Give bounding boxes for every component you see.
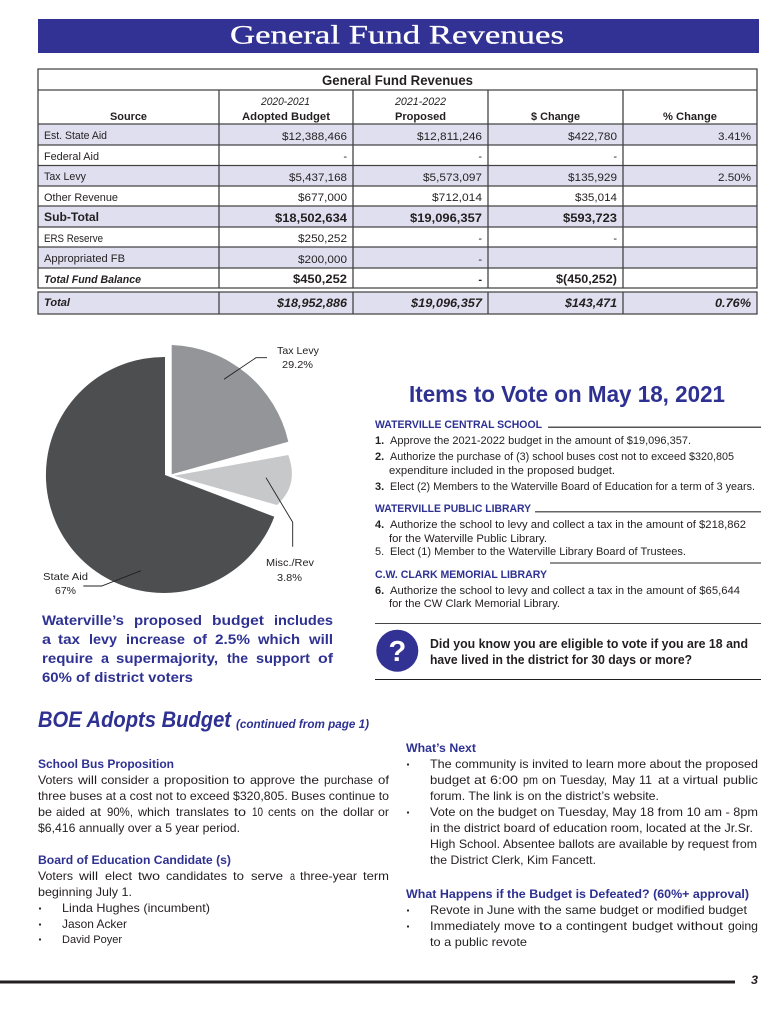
row: Total: $143,471 xyxy=(564,298,617,310)
text block: school bus proposition: or xyxy=(378,805,389,819)
icon: question mark: ? xyxy=(388,636,406,668)
row: ERS Reserve xyxy=(44,233,617,245)
row: Sub-Total: $593,723 xyxy=(563,213,617,225)
text block: board of education candidates: will xyxy=(78,869,98,883)
label: state aid: State Aid xyxy=(43,571,88,583)
text block: what's next: Tuesday, xyxy=(560,773,607,787)
row: Total Fund Balance: $(450,252) xyxy=(556,274,617,286)
table title: General Fund Revenues xyxy=(322,73,473,88)
text block: board of education candidates: elect xyxy=(105,869,133,883)
column headers: % Change xyxy=(663,111,717,123)
text block: what's next: May xyxy=(612,773,635,787)
text block: school bus proposition: the xyxy=(320,805,338,819)
row: Est. State Aid: $12,388,466 xyxy=(282,131,347,143)
column headers: Source xyxy=(110,111,147,123)
label: tax levy: 29.2% xyxy=(282,359,313,371)
text block: what's next: High School. Absentee ballots are available by request from xyxy=(430,837,757,851)
text block: school bus proposition: consider xyxy=(101,773,149,787)
callout: supermajority: Waterville’s xyxy=(42,612,124,628)
row: Sub-Total: $18,502,634 xyxy=(275,213,348,225)
row: ERS Reserve: $250,252 xyxy=(298,233,347,245)
text block: what's next: a xyxy=(673,773,679,787)
callout: supermajority: includes xyxy=(274,612,333,628)
text block: what's next: 11 xyxy=(639,773,652,787)
text block: school bus proposition: which xyxy=(137,805,170,819)
text block: school bus proposition: three buses at a cost not to exceed $320,805. Buses continue to xyxy=(38,789,389,803)
row: Tax Levy: $5,573,097 xyxy=(423,172,482,184)
row: Est. State Aid: $422,780 xyxy=(568,131,617,143)
candidate list: Jason Acker xyxy=(62,917,127,931)
section: Waterville Public Library: 5. xyxy=(375,546,384,558)
text block: if the budget is defeated: move xyxy=(504,919,535,933)
icon: question mark xyxy=(376,630,418,672)
text block: school bus proposition: translates xyxy=(176,805,229,819)
text block: board of education candidates: Board of Education Candidate (s) xyxy=(38,853,231,867)
title banner: General Fund Revenues xyxy=(230,20,564,50)
row: Federal Aid xyxy=(44,151,617,163)
text block: what's next: Vote on the budget on Tuesday, May 18 from 10 am - 8pm xyxy=(430,805,758,819)
text block: what's next: 6:00 xyxy=(490,773,518,787)
column headers xyxy=(110,96,717,123)
slice: misc revenue xyxy=(174,455,292,505)
title banner xyxy=(38,19,759,53)
callout: supermajority: will xyxy=(308,631,333,647)
row: Federal Aid: Federal Aid xyxy=(44,151,99,163)
did you know callout: Did you know you are eligible to vote if you are 18 and xyxy=(430,637,748,651)
row: Sub-Total xyxy=(44,210,617,225)
section: Waterville Public Library: 4. xyxy=(375,519,384,531)
text block: if the budget is defeated: budget xyxy=(632,919,674,933)
heading: BOE adopts budget: (continued from page 1) xyxy=(236,717,369,731)
text block: what's next: on xyxy=(542,773,556,787)
text block: school bus proposition: aided xyxy=(56,805,85,819)
row: ERS Reserve: ERS Reserve xyxy=(44,233,103,245)
callout: supermajority: the xyxy=(227,650,248,666)
section: Waterville Central School: Approve the 2021-2022 budget in the amount of $19,096,357. xyxy=(390,435,691,447)
did you know callout xyxy=(375,623,761,680)
text block: school bus proposition: 10 xyxy=(252,805,263,819)
text block: board of education candidates: beginning July 1. xyxy=(38,885,132,899)
row: Tax Levy: 2.50% xyxy=(718,172,751,184)
section: Waterville Central School: Elect (2) Members to the Waterville Board of Education for a term of 3 years. xyxy=(390,481,755,493)
slice: tax levy xyxy=(172,345,288,474)
callout: supermajority: a xyxy=(101,650,109,666)
candidate list: Linda Hughes (incumbent) xyxy=(62,901,210,915)
callout: supermajority: 60% of district voters xyxy=(42,669,193,685)
text block: if the budget is defeated: to a public revote xyxy=(430,935,527,949)
pie chart xyxy=(43,345,320,597)
callout: supermajority: tax xyxy=(58,631,80,647)
label: misc revenue: Misc./Rev xyxy=(266,557,315,569)
section: C.W. Clark Memorial Library: for the CW Clark Memorial Library. xyxy=(389,598,560,610)
row: Tax Levy: Tax Levy xyxy=(44,171,86,183)
text block: board of education candidates: a xyxy=(290,869,295,883)
text block: what's next: in the district board of education room, located at the Jr.Sr. xyxy=(430,821,753,835)
text block: what's next: budget xyxy=(430,773,471,787)
row: Tax Levy: $135,929 xyxy=(568,172,617,184)
text block: board of education candidates: serve xyxy=(251,869,283,883)
row: Total Fund Balance xyxy=(44,274,617,286)
heading: items to vote: Items to Vote on May 18, 2021 xyxy=(409,381,725,407)
text block: if the budget is defeated: Immediately xyxy=(430,919,500,933)
row: Total xyxy=(44,297,751,310)
text block: school bus proposition: to xyxy=(233,773,245,787)
callout: supermajority: support xyxy=(256,650,310,666)
text block: board of education candidates xyxy=(38,853,389,946)
text block: school bus proposition: 90%, xyxy=(107,805,133,819)
row: Sub-Total: Sub-Total xyxy=(44,210,99,224)
text block: if the budget is defeated: a xyxy=(556,919,562,933)
text block: what's next: The community is invited to learn more about the proposed xyxy=(430,757,758,771)
callout: supermajority: require xyxy=(42,650,93,666)
row: Federal Aid: - xyxy=(343,151,347,163)
row: Tax Levy xyxy=(44,171,751,184)
section: Waterville Public Library: Authorize the school to levy and collect a tax in the amount of $218,862 xyxy=(390,519,746,531)
candidate list: David Poyer xyxy=(62,934,122,946)
text block: if the budget is defeated: contingent xyxy=(566,919,628,933)
row: Other Revenue xyxy=(44,192,617,204)
row: Est. State Aid xyxy=(44,130,751,143)
row: Total Fund Balance: - xyxy=(478,274,482,286)
section: Waterville Public Library: for the Waterville Public Library. xyxy=(389,533,547,545)
row: Federal Aid: - xyxy=(613,151,617,163)
section: Waterville Central School: WATERVILLE CENTRAL SCHOOL xyxy=(375,419,542,431)
callout: supermajority: 2.5% xyxy=(215,631,251,647)
footer rule and page number xyxy=(0,975,759,987)
did you know callout: have lived in the district for 30 days or more? xyxy=(430,653,692,667)
text block: school bus proposition: a xyxy=(153,773,159,787)
text block: school bus proposition: on xyxy=(301,805,314,819)
text block: board of education candidates: two xyxy=(138,869,160,883)
text block: what's next: pm xyxy=(523,773,538,787)
leader lines xyxy=(83,358,293,586)
section: Waterville Central School: 1. xyxy=(375,435,384,447)
section: Waterville Public Library: Elect (1) Member to the Waterville Library Board of Trustees. xyxy=(390,546,686,558)
callout: supermajority: which xyxy=(257,631,300,647)
text block: if the budget is defeated: without xyxy=(676,919,724,933)
text block: school bus proposition: approve xyxy=(250,773,295,787)
text block: if the budget is defeated: Revote in June with the same budget or modified budget xyxy=(430,903,748,917)
footer rule and page number: 3 xyxy=(751,975,759,987)
text block: school bus proposition: the xyxy=(300,773,319,787)
text block: school bus proposition: cents xyxy=(268,805,296,819)
row: Other Revenue: Other Revenue xyxy=(44,192,118,204)
row: Other Revenue: $35,014 xyxy=(575,192,617,204)
section: Waterville Public Library: WATERVILLE PUBLIC LIBRARY xyxy=(375,503,532,515)
section: Waterville Central School: Authorize the purchase of (3) school buses cost not to exceed $320,805 xyxy=(390,451,734,463)
text block: what's next: virtual xyxy=(683,773,718,787)
row: Appropriated FB: $200,000 xyxy=(298,254,347,266)
text block: if the budget is defeated: What Happens if the Budget is Defeated? (60%+ approval) xyxy=(406,887,749,901)
column headers: 2020-2021 xyxy=(260,96,310,108)
row: Total: Total xyxy=(44,297,71,309)
callout: supermajority: of xyxy=(318,650,333,666)
column headers: $ Change xyxy=(531,111,580,123)
row: Total Fund Balance: $450,252 xyxy=(293,274,347,286)
text block: school bus proposition: be xyxy=(38,805,52,819)
text block: what's next: public xyxy=(723,773,758,787)
revenue table xyxy=(38,69,757,314)
row: Appropriated FB: Appropriated FB xyxy=(44,253,125,265)
callout: supermajority: supermajority, xyxy=(116,650,218,666)
label: tax levy: Tax Levy xyxy=(277,345,320,357)
text block: school bus proposition: School Bus Proposition xyxy=(38,757,174,771)
section: C.W. Clark Memorial Library: 6. xyxy=(375,585,384,597)
row: Total: 0.76% xyxy=(715,298,751,310)
text block: if the budget is defeated: going xyxy=(728,919,758,933)
text block: school bus proposition: Voters xyxy=(38,773,73,787)
row: Total: $18,952,886 xyxy=(276,298,348,310)
text block: school bus proposition: of xyxy=(378,773,390,787)
text block: school bus proposition: proposition xyxy=(164,773,229,787)
text block: what's next: forum. The link is on the district’s website. xyxy=(430,789,659,803)
section: C.W. Clark Memorial Library: Authorize the school to levy and collect a tax in the amount of $65,644 xyxy=(390,585,740,597)
text block: board of education candidates: Voters xyxy=(38,869,73,883)
text block: board of education candidates: to xyxy=(233,869,244,883)
section: Waterville Central School: 3. xyxy=(375,481,384,493)
row: Other Revenue: $712,014 xyxy=(432,192,482,204)
text block: what's next: What’s Next xyxy=(406,741,476,755)
heading: BOE adopts budget: BOE Adopts Budget xyxy=(38,707,233,732)
label: state aid: 67% xyxy=(55,585,76,597)
text block: school bus proposition: purchase xyxy=(324,773,373,787)
row: Other Revenue: $677,000 xyxy=(298,192,347,204)
text block: board of education candidates: term xyxy=(363,869,389,883)
text block: school bus proposition: $6,416 annually over a 5 year period. xyxy=(38,821,240,835)
label: tax levy xyxy=(277,345,320,371)
text block: school bus proposition: at xyxy=(90,805,102,819)
text block: what's next xyxy=(406,741,758,867)
callout: supermajority: budget xyxy=(212,612,264,628)
label: state aid xyxy=(43,571,88,597)
row: ERS Reserve: - xyxy=(478,233,482,245)
column headers: Adopted Budget xyxy=(242,111,330,123)
text block: board of education candidates: three-year xyxy=(300,869,357,883)
callout: supermajority: proposed xyxy=(134,612,202,628)
section: Waterville Central School xyxy=(375,419,761,493)
callout: supermajority: increase xyxy=(126,631,185,647)
label: misc revenue xyxy=(266,557,315,584)
row: Federal Aid: - xyxy=(478,151,482,163)
callout: supermajority: levy xyxy=(89,631,117,647)
row: Appropriated FB: - xyxy=(478,254,482,266)
row: Est. State Aid: Est. State Aid xyxy=(44,130,107,142)
label: misc revenue: 3.8% xyxy=(277,572,302,584)
text block: if the budget is defeated: to xyxy=(539,919,552,933)
text block: school bus proposition: will xyxy=(77,773,97,787)
text block: school bus proposition: to xyxy=(234,805,246,819)
callout: supermajority: of xyxy=(193,631,207,647)
section: C.W. Clark Memorial Library xyxy=(375,569,740,610)
column headers: Proposed xyxy=(395,111,446,123)
section: C.W. Clark Memorial Library: C.W. CLARK MEMORIAL LIBRARY xyxy=(375,569,548,581)
row: Total Fund Balance: Total Fund Balance xyxy=(44,274,141,286)
callout: supermajority: a xyxy=(42,631,51,647)
row: Sub-Total: $19,096,357 xyxy=(410,213,482,225)
text block: if the budget is defeated xyxy=(406,887,758,949)
row: ERS Reserve: - xyxy=(613,233,617,245)
row: Total: $19,096,357 xyxy=(410,298,483,310)
text block: what's next: at xyxy=(658,773,670,787)
text block: school bus proposition xyxy=(38,757,390,835)
section: Waterville Public Library xyxy=(375,503,761,564)
column headers: 2021-2022 xyxy=(394,96,446,108)
row: Tax Levy: $5,437,168 xyxy=(289,172,347,184)
vote list xyxy=(375,419,761,610)
text block: what's next: the District Clerk, Kim Fancett. xyxy=(430,853,596,867)
slice: state aid xyxy=(46,357,274,593)
candidate list xyxy=(39,901,210,946)
section: Waterville Central School: expenditure included in the proposed budget. xyxy=(389,465,615,477)
row: Est. State Aid: 3.41% xyxy=(718,131,751,143)
text block: what's next: at xyxy=(474,773,487,787)
row: Appropriated FB xyxy=(44,253,482,266)
text block: school bus proposition: dollar xyxy=(343,805,374,819)
heading: BOE adopts budget xyxy=(38,707,369,732)
callout: supermajority xyxy=(42,612,333,685)
row: Est. State Aid: $12,811,246 xyxy=(417,131,482,143)
text block: board of education candidates: candidates xyxy=(166,869,227,883)
section: Waterville Central School: 2. xyxy=(375,451,384,463)
